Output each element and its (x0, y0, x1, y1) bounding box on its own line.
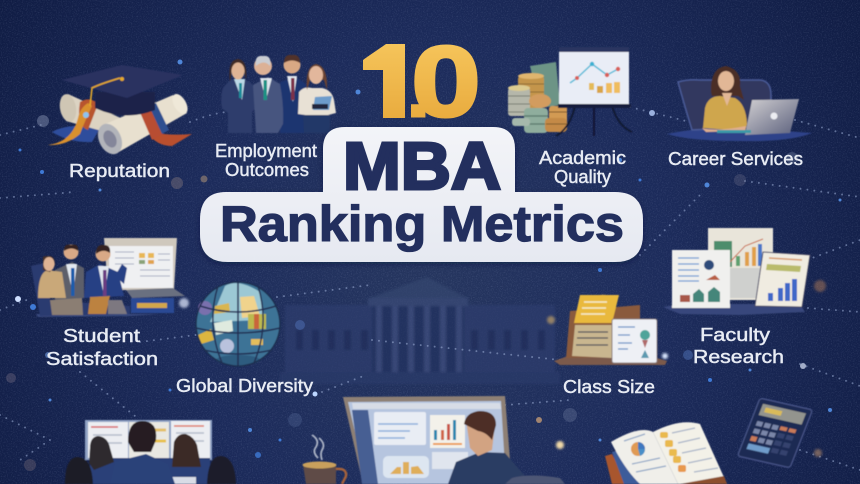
icon: four graduates in suits (221, 55, 336, 133)
icon: students and presentation screen (31, 238, 185, 317)
title line: Ranking Metrics: Ranking Metrics (220, 195, 624, 252)
label: Student Satisfaction (46, 325, 158, 369)
icon: analyst at laptop (343, 396, 565, 484)
title number: 10 (358, 26, 481, 137)
icon: audience watching screens (65, 420, 236, 484)
label: Student Satisfaction: Satisfaction (46, 348, 158, 369)
title panel (200, 127, 643, 262)
label: Reputation: Reputation (69, 160, 170, 181)
icon: open book with pie chart (605, 422, 727, 484)
label: Faculty Research: Research (693, 346, 784, 367)
faded campus building (280, 277, 560, 384)
icon: calculator (737, 398, 813, 468)
icon: coin stacks and easel chart (508, 47, 632, 136)
label: Academic Quality: Quality (554, 166, 612, 187)
icon: global diversity globe (196, 282, 280, 366)
label: Employment Outcomes: Employment (215, 140, 317, 161)
label: Career Services: Career Services (668, 148, 803, 169)
label: Academic Quality: Academic (539, 147, 626, 168)
label: Class Size: Class Size (563, 376, 655, 397)
icon: graduation cap and diplomas (48, 65, 192, 158)
label: Student Satisfaction: Student (63, 325, 140, 346)
icon: advisor at laptop (667, 66, 812, 141)
icon: coffee cup with steam (302, 435, 346, 484)
label: Faculty Research (693, 324, 784, 367)
title number (363, 44, 478, 118)
icon: class size folder and notes (554, 295, 667, 365)
title line: MBA: MBA (343, 129, 501, 204)
label: Employment Outcomes: Outcomes (225, 159, 309, 180)
label: Faculty Research: Faculty (700, 324, 771, 345)
dotted network lines (0, 107, 860, 470)
label: Employment Outcomes (215, 140, 317, 180)
icon: faculty research reports (663, 228, 810, 315)
label: Academic Quality (539, 147, 626, 187)
label: Global Diversity: Global Diversity (176, 375, 314, 396)
